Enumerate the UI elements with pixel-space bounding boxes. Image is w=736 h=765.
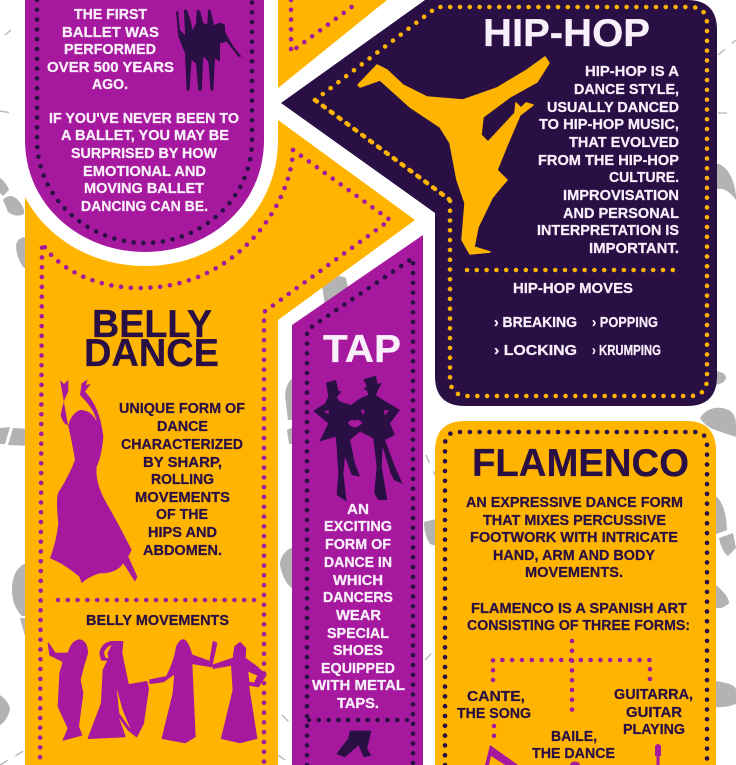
text: tap description: FORM OF (325, 537, 391, 553)
icon: tap shoe (336, 731, 371, 757)
text: hip-hop description: HIP-HOP IS A (585, 64, 680, 80)
text: belly description: DANCE (157, 419, 208, 435)
text: tap description: EQUIPPED (321, 661, 395, 677)
heading: tap: TAP (323, 328, 401, 371)
text: flamenco description (466, 495, 690, 634)
text: ballet first performed: BALLET WAS (62, 25, 159, 41)
text: guitarra: GUITARRA, (614, 687, 693, 703)
text: tap description: EXCITING (324, 519, 392, 535)
text: guitarra (614, 687, 693, 738)
text: baile: THE DANCE (532, 746, 615, 762)
panel: top yellow corner (278, 0, 387, 88)
text: flamenco description: FLAMENCO IS A SPANISH ART (471, 601, 687, 617)
text: hip-hop description: AND PERSONAL (563, 206, 679, 222)
panel: tap (292, 235, 423, 765)
text: tap description: SPECIAL (327, 626, 389, 642)
text: ballet emotional: DANCING CAN BE. (81, 199, 208, 215)
text: hip-hop description: DANCE STYLE, (574, 82, 679, 98)
text: tap description: WEAR (336, 608, 382, 624)
heading: belly dance: BELLY (92, 303, 212, 346)
panel: flamenco (435, 421, 716, 765)
heading: hip-hop: HIP-HOP (483, 12, 650, 55)
text: flamenco description: AN EXPRESSIVE DANCE FORM (466, 495, 683, 511)
text: belly description: ROLLING (151, 472, 214, 488)
text: flamenco description: MOVEMENTS. (525, 565, 623, 581)
text: hip-hop description: CULTURE. (609, 170, 679, 186)
text: ballet first performed: PERFORMED (64, 42, 156, 58)
text: hip-hop moves: › POPPING (592, 315, 658, 331)
text: belly movements: BELLY MOVEMENTS (86, 613, 229, 629)
text: flamenco description: THAT MIXES PERCUSSIVE (483, 513, 666, 529)
text: belly description: ABDOMEN. (143, 543, 222, 559)
icon: dancer head (570, 762, 580, 765)
text: hip-hop description: IMPORTANT. (589, 241, 679, 257)
text: tap description: DANCERS (323, 590, 393, 606)
panel: hip-hop (281, 0, 717, 406)
text: ballet first performed: AGO. (92, 77, 128, 93)
text: ballet emotional: SURPRISED BY HOW (71, 146, 217, 162)
text: ballet emotional: IF YOU'VE NEVER BEEN TO (49, 111, 239, 127)
text: tap description: WHICH (333, 573, 383, 589)
text: tap description: TAPS. (337, 696, 379, 712)
text: tap description: SHOES (333, 643, 383, 659)
text: hip-hop description: INTERPRETATION IS (537, 223, 679, 239)
text: guitarra: GUITAR (626, 705, 683, 721)
icon: guitar (655, 744, 661, 765)
heading: flamenco: FLAMENCO (472, 442, 689, 485)
text: ballet emotional: MOVING BALLET (84, 181, 204, 197)
text: flamenco description: HAND, ARM AND BODY (493, 548, 655, 564)
text: belly description: MOVEMENTS (135, 490, 230, 506)
text: hip-hop description: IMPROVISATION (563, 188, 679, 204)
icon: ballet dancers (176, 9, 242, 91)
icon: breakdancer (358, 57, 549, 254)
diagram: three forms connector (493, 641, 650, 737)
text: hip-hop moves: › KRUMPING (592, 343, 661, 359)
text: cante: THE SONG (457, 706, 531, 722)
icon: tap dancers (313, 376, 403, 502)
heading: belly dance: DANCE (84, 332, 219, 375)
panel: ballet (25, 0, 264, 252)
icon: belly dancer (50, 379, 137, 583)
text: hip-hop description: USUALLY DANCED (547, 100, 679, 116)
text: hip-hop description: FROM THE HIP-HOP (538, 153, 679, 169)
text: flamenco description: CONSISTING OF THREE FORMS: (467, 618, 690, 634)
text: belly description: BY SHARP, (143, 455, 222, 471)
text: ballet first performed (47, 7, 174, 93)
text: tap description: AN (347, 502, 369, 518)
text: belly description: UNIQUE FORM OF (119, 401, 245, 417)
text: flamenco description: FOOTWORK WITH INTRICATE (470, 530, 678, 546)
text: belly description: HIPS AND (148, 525, 217, 541)
icon: music sheet (485, 745, 518, 765)
text: cante (457, 689, 531, 722)
text: ballet emotional: EMOTIONAL AND (83, 164, 206, 180)
text: hip-hop moves (494, 281, 661, 359)
text: belly description: OF THE (156, 507, 208, 523)
icon: four belly dancers (48, 640, 266, 743)
text: ballet first performed: THE FIRST (74, 7, 147, 23)
text: ballet emotional (49, 111, 239, 215)
text: tap description: WITH METAL (312, 678, 405, 694)
heading: belly dance (84, 303, 219, 375)
text: tap description (312, 502, 405, 712)
text: baile (532, 729, 615, 762)
text: hip-hop description (537, 64, 680, 257)
text: belly description: CHARACTERIZED (121, 437, 243, 453)
text: cante: CANTE, (467, 689, 525, 705)
text: ballet emotional: A BALLET, YOU MAY BE (61, 128, 229, 144)
text: tap description: DANCE IN (324, 555, 392, 571)
text: ballet first performed: OVER 500 YEARS (47, 60, 174, 76)
text: baile: BAILE, (551, 729, 597, 745)
text: belly description (119, 401, 245, 559)
text: hip-hop description: THAT EVOLVED (569, 135, 679, 151)
text: guitarra: PLAYING (623, 722, 685, 738)
text: hip-hop moves: › LOCKING (494, 343, 577, 359)
text: hip-hop description: TO HIP-HOP MUSIC, (539, 117, 679, 133)
background footprints (0, 163, 736, 725)
text: hip-hop moves: › BREAKING (494, 315, 577, 331)
panel: belly dance (25, 120, 415, 765)
text: hip-hop moves: HIP-HOP MOVES (513, 281, 633, 297)
